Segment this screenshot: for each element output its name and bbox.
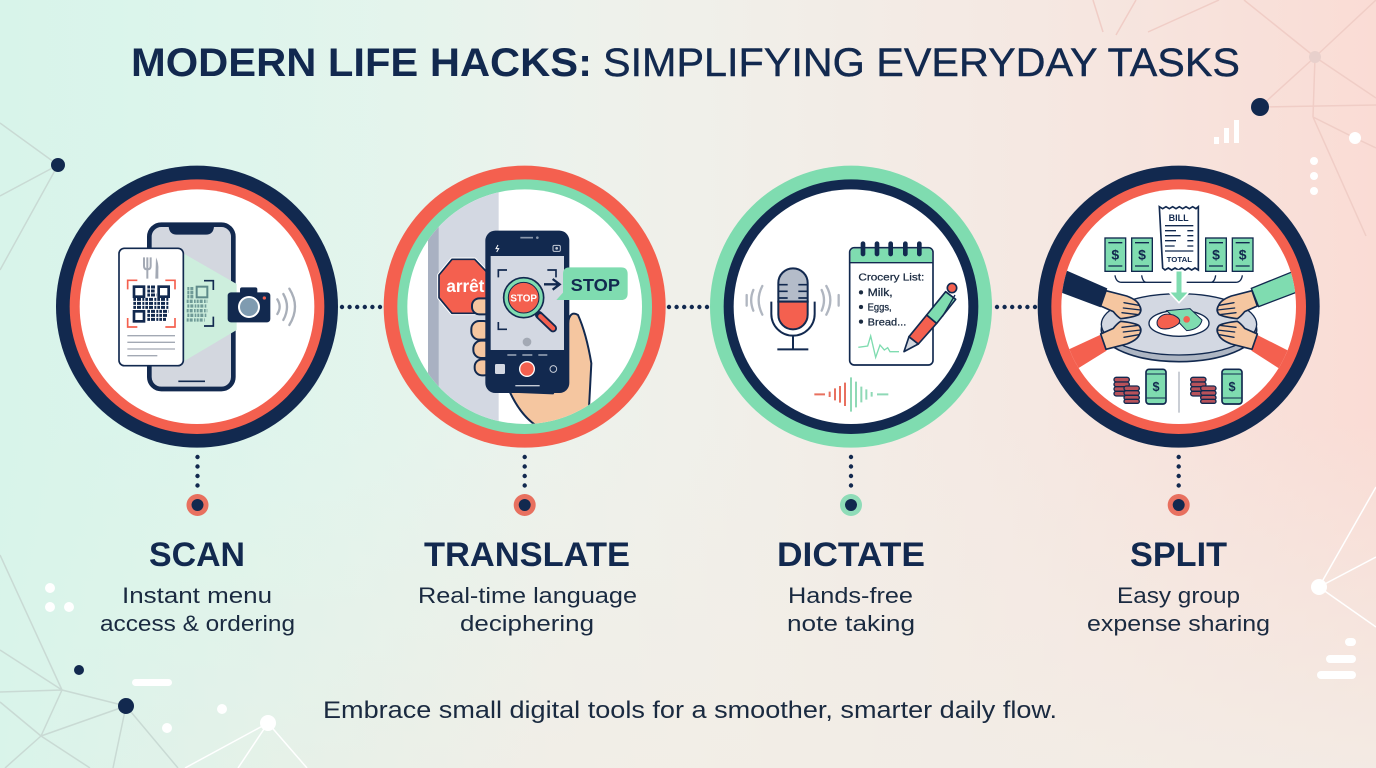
bill: BILL	[1169, 213, 1189, 223]
sound waves	[277, 289, 295, 325]
table	[1101, 294, 1257, 362]
text block: translate	[418, 536, 637, 636]
bill: TOTAL	[1167, 255, 1193, 264]
text block: split: expense sharing	[1087, 611, 1270, 636]
text block: split: SPLIT	[1130, 536, 1227, 574]
hands	[1101, 291, 1257, 349]
icon: translate circle	[384, 166, 666, 448]
title: SIMPLIFYING EVERYDAY TASKS	[603, 41, 1240, 85]
title: MODERN LIFE HACKS:	[131, 41, 592, 85]
connector dots between circles	[340, 305, 1037, 309]
text block: dictate: Hands-free	[788, 583, 913, 608]
title	[131, 41, 1240, 85]
icon: phone	[149, 225, 233, 389]
icon: dictate circle	[710, 166, 992, 448]
text block: dictate	[777, 536, 925, 636]
step connectors and markers	[186, 455, 1190, 516]
scan beam	[183, 253, 237, 362]
hand	[471, 298, 591, 427]
grocery list: Crocery List:	[858, 273, 924, 284]
arrow down	[1169, 271, 1189, 303]
sleeves	[1062, 270, 1296, 368]
grocery list: Bread...	[868, 317, 906, 328]
text block: scan	[100, 536, 295, 636]
icon: camera	[228, 287, 270, 322]
magnifier: STOP	[510, 293, 537, 304]
stop sign	[439, 259, 490, 313]
icon: scan circle	[56, 166, 338, 448]
text block: split: Easy group	[1117, 583, 1240, 608]
arrow	[544, 279, 560, 290]
grocery list: Milk,	[868, 287, 893, 299]
stop sign: arrêt	[446, 276, 485, 296]
plate with food	[1149, 309, 1209, 336]
speech bubble STOP	[556, 267, 628, 300]
bill	[1159, 207, 1198, 270]
text block: translate: TRANSLATE	[424, 536, 630, 574]
text block: translate: Real-time language	[418, 583, 637, 608]
qr code	[133, 287, 169, 321]
money notes	[1105, 238, 1253, 282]
text block: scan: SCAN	[149, 536, 245, 574]
text block: translate: deciphering	[460, 611, 594, 636]
wall	[428, 180, 499, 433]
icon: notebook	[850, 244, 933, 365]
text block: scan: Instant menu	[122, 583, 272, 608]
text block: dictate: DICTATE	[777, 536, 925, 574]
grocery list: Eggs,	[868, 303, 892, 314]
text block: scan: access & ordering	[100, 611, 295, 636]
text block: dictate: note taking	[787, 611, 915, 636]
waveform	[814, 377, 888, 412]
icon: microphone	[747, 268, 839, 349]
speech bubble STOP: STOP	[571, 275, 620, 295]
footer tagline: Embrace small digital tools for a smoother, smarter daily flow.	[323, 697, 1057, 724]
grocery list	[858, 273, 924, 328]
magnifier	[504, 278, 553, 328]
menu card	[119, 248, 183, 366]
icon: pen	[904, 283, 957, 352]
translate phone	[485, 231, 569, 393]
ghost qr code	[187, 281, 213, 326]
coins and phones	[1114, 369, 1242, 413]
icon: split circle	[1038, 166, 1320, 448]
text block: split	[1087, 536, 1270, 636]
